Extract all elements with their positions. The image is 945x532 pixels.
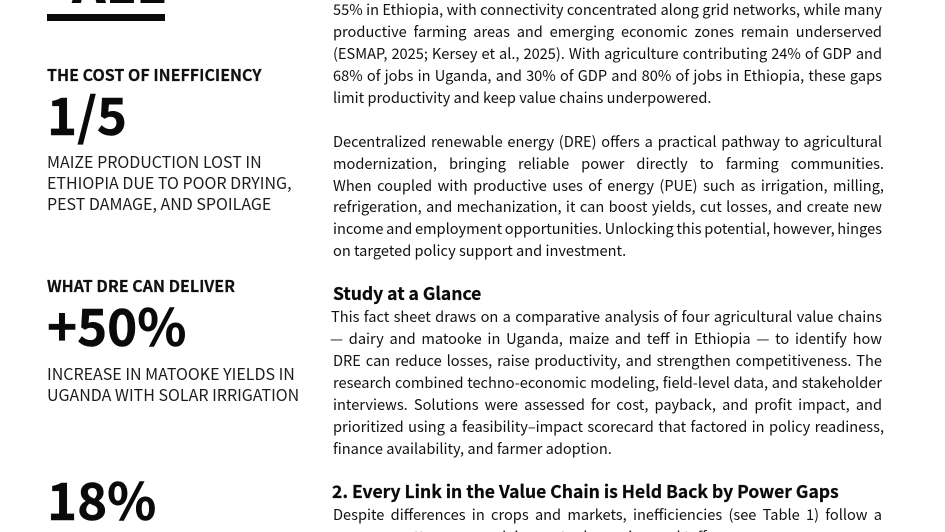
paragraph: energy access and agriculture: (ESMAP, 2025; Kersey et al., 2025). With agriculture contributing 24% of GDP and: [333, 43, 882, 64]
paragraph: study at a glance: DRE can reduce losses, raise productivity, and strengthen competitiveness. The: [333, 350, 882, 371]
paragraph: energy access and agriculture: limit productivity and keep value chains underpowered.: [333, 87, 711, 108]
paragraph: study at a glance: finance availability, and farmer adoption.: [333, 438, 612, 459]
kicker: the cost of inefficiency: THE COST OF INEFFICIENCY: [47, 62, 262, 86]
paragraph: study at a glance: [330, 306, 884, 459]
heading: section 2: 2. Every Link in the Value Chain is Held Back by Power Gaps: [332, 479, 839, 504]
kicker: what DRE can deliver: WHAT DRE CAN DELIVER: [47, 273, 235, 297]
paragraph: energy access and agriculture: [333, 0, 882, 108]
paragraph: section 2 intro: Despite differences in crops and markets, inefficiencies (see Table 1) follow a: [333, 504, 882, 525]
paragraph: decentralized renewable energy: refrigeration, and mechanization, it can boost yields, cut losses, and create new: [333, 196, 882, 217]
paragraph: decentralized renewable energy: on targeted policy support and investment.: [333, 240, 626, 261]
paragraph: decentralized renewable energy: income and employment opportunities. Unlocking this potential, however, hinges: [333, 218, 882, 239]
caption: maize production lost: ETHIOPIA DUE TO POOR DRYING,: [47, 170, 292, 194]
caption: maize production lost: [47, 149, 292, 215]
paragraph: study at a glance: This fact sheet draws on a comparative analysis of four agricultural value chains: [331, 306, 882, 327]
stat: 1/5: 1/5: [47, 76, 127, 150]
paragraph: study at a glance: — dairy and matooke in Uganda, maize and teff in Ethiopia — to identify how: [330, 328, 882, 349]
paragraph: study at a glance: prioritized using a feasibility–impact scorecard that factored in policy readiness,: [333, 416, 884, 437]
paragraph: energy access and agriculture: 68% of jobs in Uganda, and 30% of GDP and 80% of jobs in Ethiopia, these gaps: [333, 65, 882, 86]
stat: +50%: +50%: [47, 287, 186, 361]
paragraph: energy access and agriculture: productive farming areas and emerging economic zones remain underserved: [333, 21, 882, 42]
paragraph: study at a glance: research combined techno-economic modeling, field-level data, and stakeholder: [333, 372, 882, 393]
paragraph: decentralized renewable energy: When coupled with productive uses of energy (PUE) such as irrigation, milling,: [333, 175, 884, 196]
paragraph: decentralized renewable energy: modernization, bringing reliable power directly to farming communities.: [333, 153, 884, 174]
heading: study at a glance: Study at a Glance: [333, 281, 481, 306]
caption: matooke yields: INCREASE IN MATOOKE YIELDS IN: [47, 361, 295, 385]
paragraph: study at a glance: interviews. Solutions were assessed for cost, payback, and profit impact, and: [333, 394, 882, 415]
heading underline bar: [47, 14, 165, 21]
caption: matooke yields: [47, 361, 299, 406]
paragraph: decentralized renewable energy: Decentralized renewable energy (DRE) offers a practical pathway to agricultural: [333, 131, 882, 152]
caption: maize production lost: PEST DAMAGE, AND SPOILAGE: [47, 191, 271, 215]
caption: maize production lost: MAIZE PRODUCTION LOST IN: [47, 149, 262, 173]
left column: key statistics: [47, 0, 299, 532]
paragraph: decentralized renewable energy: [333, 131, 884, 261]
caption: matooke yields: UGANDA WITH SOLAR IRRIGATION: [47, 382, 299, 406]
